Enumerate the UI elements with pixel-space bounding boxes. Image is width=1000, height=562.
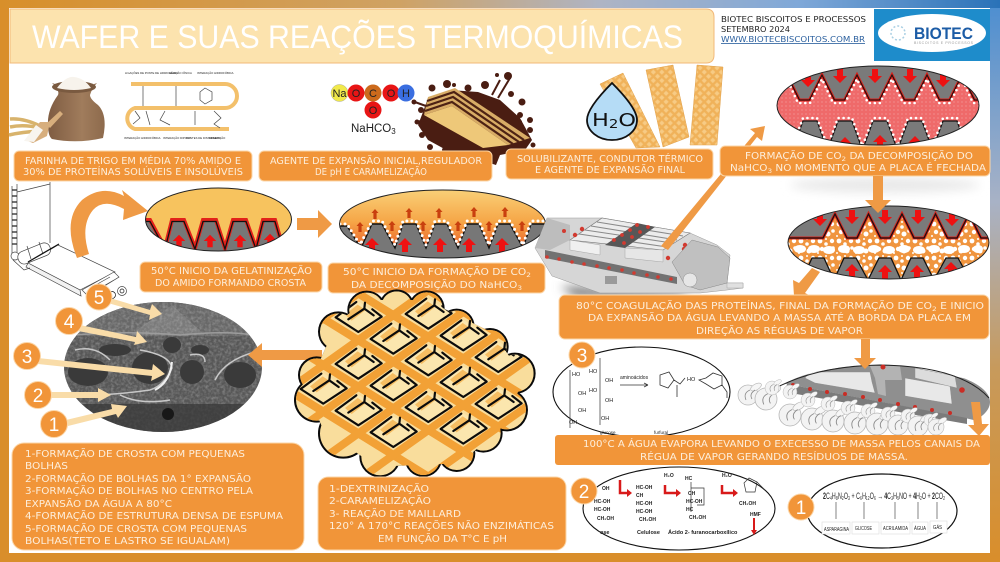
arrow: closed plate to coagulation xyxy=(865,176,891,213)
text box: estrutura legend: 1-FORMAÇÃO DE CROSTA COM PEQUENAS xyxy=(25,449,245,460)
icon: water drop: 2 xyxy=(609,117,618,131)
chemistry: Maillard sugar degradation: HO xyxy=(589,388,598,394)
text box: coagulação: E INICIO xyxy=(937,301,984,312)
text box: solubilizante: E AGENTE DE EXPANSÃO FINAL xyxy=(535,165,686,176)
pointer 2: 2 xyxy=(33,386,43,407)
text box: coagulação: DA EXPANSÃO DA ÁGUA LEVANDO A MASSA ATÉ A BORDA DA PLACA EM xyxy=(588,312,971,324)
icon: water drop xyxy=(587,83,637,140)
chemistry: caramelization chain: CH₂OH xyxy=(597,516,614,522)
text box: evaporação xyxy=(555,435,990,465)
text box: coagulação xyxy=(559,295,989,339)
BIOTEC logo: BIOTEC xyxy=(914,24,973,43)
text box: formação de CO2: 3 xyxy=(767,167,772,175)
company credits: BIOTEC BISCOITOS E PROCESSOS xyxy=(721,14,866,24)
arrow: coagulation to caption xyxy=(793,268,820,296)
company credits xyxy=(721,14,866,44)
chemistry: caramelization chain: HMF xyxy=(750,512,761,518)
chart: protein bond diagram: LIGAÇÕES DE PONTE DE HIDROGÊNIO xyxy=(125,70,179,75)
text box: reações xyxy=(318,477,566,550)
marker: number 1 chemistry: 1 xyxy=(796,498,806,519)
pointer 4 xyxy=(56,308,147,345)
text box: início CO2: 50°C INICIO DA FORMAÇÃO DE CO xyxy=(343,267,505,278)
text box: solubilizante xyxy=(506,149,713,179)
chart: protein bond diagram: INTERAÇÃO HIDROFÓBICA xyxy=(197,70,234,75)
pointer 4: 4 xyxy=(64,312,75,333)
chemistry: caramelization chain: Ácido 2- furanocarboxílico xyxy=(668,529,738,536)
text box: formação de CO2: DA DECOMPOSIÇÃO DO xyxy=(846,151,973,162)
text box: início CO2: 2 xyxy=(526,271,531,279)
chart: protein bond diagram: INTERAÇÃO HIDROFÓBICA xyxy=(124,135,161,140)
text box: solubilizante: SOLUBILIZANTE, CONDUTOR TÉRMICO xyxy=(517,153,703,165)
pointer 3: 3 xyxy=(22,347,32,368)
icon: flour sack xyxy=(9,77,105,143)
icon: NaHCO3 molecule: Na xyxy=(332,88,347,100)
ellipse: plate closed, CO2 formation xyxy=(776,66,980,146)
pointer 2 xyxy=(24,382,111,408)
chemistry: caramelization chain: CH₂OH xyxy=(639,517,656,523)
pointer 3 xyxy=(14,342,165,381)
text box: agente de expansão: DE pH E CARAMELIZAÇÃO xyxy=(315,167,427,178)
text box: coagulação: 80°C COAGULAÇÃO DAS PROTEÍNAS, FINAL DA FORMAÇÃO DE CO xyxy=(576,301,886,312)
text box: formação de CO2: 2 xyxy=(842,155,846,163)
text box: agente de expansão xyxy=(259,151,492,181)
ellipse: CO2 formation start xyxy=(339,190,546,258)
company credits: WWW.BIOTECBISCOITOS.COM.BR xyxy=(721,34,865,44)
text box: início CO2 xyxy=(328,263,545,293)
icon: NaHCO3 molecule: O xyxy=(387,88,396,100)
ellipse: coagulation and bubbles xyxy=(788,206,990,280)
pointer 1: 1 xyxy=(49,415,59,436)
chemistry: Maillard sugar degradation: OH xyxy=(601,416,609,422)
text box: reações: EM FUNÇÃO DA T°C E pH xyxy=(378,534,507,545)
chemistry: Maillard sugar degradation xyxy=(553,347,730,437)
text box: coagulação: DIREÇÃO AS RÉGUAS DE VAPOR xyxy=(696,325,864,337)
text box: início CO2: 3 xyxy=(517,284,522,292)
arrow: steam rail to residue caption xyxy=(968,402,989,436)
marker: number 2 chemistry: 2 xyxy=(579,482,589,503)
chart: protein bond diagram: INTERAÇÃO xyxy=(209,135,226,140)
marker: number 3 chemistry xyxy=(569,342,595,368)
pointer 5: 5 xyxy=(94,288,104,309)
title banner: WAFER E SUAS REAÇÕES TERMOQUÍMICAS xyxy=(32,18,683,55)
chemistry: caramelization chain: HC-OH xyxy=(636,485,653,491)
text box: formação de CO2: NO MOMENTO QUE A PLACA É FECHADA xyxy=(772,162,987,174)
pointer 5 xyxy=(86,284,162,320)
icon: chocolate wafer xyxy=(412,72,536,165)
soft shadow below caption xyxy=(790,177,980,193)
chemistry: Maillard sugar degradation: aminoácidos xyxy=(620,375,649,381)
arrow: waffle to micrograph xyxy=(248,343,322,367)
chemistry: caramelization chain: HC xyxy=(686,507,694,513)
icon: NaHCO3 molecule: C xyxy=(369,88,377,100)
chemistry: caramelization chain: Celulose xyxy=(637,530,660,536)
arrow: crust to CO2 ellipse xyxy=(297,210,332,238)
chemistry: Maillard sugar degradation: HO xyxy=(687,377,696,383)
chemistry: caramelization chain: HC xyxy=(685,476,693,482)
chemistry: caramelization chain: HC-OH xyxy=(686,499,703,505)
ellipse: steam rail with dough blobs xyxy=(738,360,995,436)
chemistry: caramelization chain: HC-OH xyxy=(636,509,653,515)
icon: water drop: H xyxy=(592,110,606,131)
chemistry: Maillard sugar degradation: furfural xyxy=(654,430,668,435)
chemistry: caramelization chain: HC-OH xyxy=(594,499,611,505)
text box: gelatinização: 50°C INICIO DA GELATINIZAÇÃO xyxy=(151,266,312,277)
ellipse: gelatinization crust xyxy=(145,188,292,252)
chemistry: caramelization chain: CH₂OH xyxy=(739,501,756,507)
text box: estrutura legend: BOLHAS(TETO E LASTRO SE IGUALAM) xyxy=(25,536,230,547)
text box: formação de CO2: NaHCO xyxy=(730,163,764,174)
text box: evaporação: RÉGUA DE VAPOR GERANDO RESÍDUOS DE MASSA. xyxy=(640,451,908,463)
text box: estrutura legend: 3-FORMAÇÃO DE BOLHAS NO CENTRO PELA xyxy=(25,486,254,497)
icon: wafer sheets xyxy=(600,65,723,148)
icon: NaHCO3 molecule: NaHCO xyxy=(351,123,391,135)
icon: NaHCO3 molecule: H xyxy=(402,88,410,100)
text box: farinha de trigo: 30% DE PROTEÍNAS SOLÚVEIS E INSOLÚVEIS xyxy=(23,166,243,178)
chemistry: caramelization chain: OH xyxy=(602,486,610,492)
chemistry: Maillard sugar degradation: OH xyxy=(605,398,613,404)
chemistry: Maillard sugar degradation: OH xyxy=(605,378,613,384)
photo: wafer cross-section micrograph xyxy=(60,300,266,435)
chemistry: acrylamide reaction: ACRILAMIDA xyxy=(883,526,909,532)
icon: NaHCO3 molecule: 3 xyxy=(391,127,396,136)
chemistry: caramelization chain: HC-OH xyxy=(636,501,653,507)
illustration: wafer press machine xyxy=(535,218,743,297)
frame: bottom bar xyxy=(9,553,990,562)
frame: left bar xyxy=(0,8,9,562)
BIOTEC logo: BISCOITOS E PROCESSOS xyxy=(914,41,974,45)
pointer 1 xyxy=(40,404,127,438)
frame: right bar xyxy=(990,8,1000,562)
text box: estrutura legend: 2-FORMAÇÃO DE BOLHAS DA 1° EXPANSÃO xyxy=(25,474,251,485)
chart: protein bond diagram: LIGAÇÃO IÔNICA xyxy=(169,70,192,75)
chemistry: caramelization chain: H₂O xyxy=(664,473,674,479)
text box: reações: 1-DEXTRINIZAÇÃO xyxy=(329,484,429,495)
chemistry: caramelization chain: CH xyxy=(688,491,696,497)
BIOTEC logo xyxy=(874,9,990,61)
text box: farinha de trigo xyxy=(14,151,252,181)
text box: evaporação: 100°C A ÁGUA EVAPORA LEVANDO O EXECESSO DE MASSA PELOS CANAIS DA xyxy=(583,438,981,450)
text box: estrutura legend xyxy=(12,443,304,550)
text box: coagulação: 2 xyxy=(932,305,937,313)
chemistry: Maillard sugar degradation: HO xyxy=(572,372,581,378)
icon: water drop: O xyxy=(618,110,636,131)
arrow: curved from conveyor to crust ellipse xyxy=(71,190,148,258)
company credits: SETEMBRO 2024 xyxy=(721,24,790,34)
chemistry: acrylamide reaction: ÁGUA xyxy=(914,525,927,532)
icon: NaHCO3 molecule xyxy=(331,84,414,136)
text box: início CO2: DA DECOMPOSIÇÃO DO NaHCO xyxy=(351,280,499,291)
text box: estrutura legend: 5-FORMAÇÃO DE CROSTA COM PEQUENAS xyxy=(25,524,247,535)
chemistry: acrylamide reaction: 2C₄H₈N₂O₃ + C₆H₁₂O₆ → 4C₃H₅NO + 4H₂O + 2CO₂ xyxy=(823,491,945,501)
chemistry: Maillard sugar degradation: OH xyxy=(578,391,586,397)
icon: conveyor machine xyxy=(11,182,126,298)
chemistry: acrylamide reaction: GÁS xyxy=(933,524,943,531)
chemistry: acrylamide reaction: GLICOSE xyxy=(855,526,873,532)
text box: gelatinização xyxy=(140,262,322,292)
text box: reações: 3- REAÇÃO DE MAILLARD xyxy=(329,509,461,520)
chemistry: caramelization chain: CH₂OH xyxy=(689,515,706,521)
chart: protein bond diagram: PONTES DE DISSULFETO xyxy=(186,136,221,140)
chemistry: Maillard sugar degradation: OH xyxy=(578,408,586,414)
text box: estrutura legend: BOLHAS xyxy=(25,461,68,472)
callouts: numbered pointers on micrograph xyxy=(14,284,165,438)
chart: protein bond diagram: INTERAÇÃO DIPOLO xyxy=(163,135,191,140)
chemistry: caramelization chain: CH xyxy=(636,493,644,499)
chemistry: acrylamide reaction: ASPARAGINA xyxy=(824,527,850,533)
marker: number 3 chemistry: 3 xyxy=(577,346,587,367)
chemistry: caramelization chain: H₂O xyxy=(722,473,732,479)
chemistry: Maillard sugar degradation: glucose xyxy=(600,430,616,435)
chemistry: Maillard sugar degradation: OH xyxy=(569,420,577,426)
chemistry: caramelization chain: ose xyxy=(600,530,609,536)
chemistry: acrylamide reaction xyxy=(807,474,957,548)
chart: protein bond diagram xyxy=(124,70,237,140)
chemistry: caramelization chain xyxy=(583,467,775,550)
arrow: press machine to closed-plate ellipse xyxy=(661,126,765,250)
frame: top bar xyxy=(0,0,1000,8)
chemistry: caramelization chain: HC-OH xyxy=(594,507,611,513)
text box: reações: 120° A 170°C REAÇÕES NÃO ENZIMÁTICAS xyxy=(329,520,554,532)
marker: number 2 chemistry xyxy=(571,478,597,504)
title banner xyxy=(10,9,714,63)
text box: agente de expansão: AGENTE DE EXPANSÃO INICIAL,REGULADOR xyxy=(270,156,482,167)
text box: formação de CO2: FORMAÇÃO DE CO xyxy=(745,151,832,162)
text box: gelatinização: DO AMIDO FORMANDO CROSTA xyxy=(155,278,307,289)
marker: number 1 chemistry xyxy=(788,494,814,520)
chemistry: Maillard sugar degradation: HO xyxy=(589,369,598,375)
text box: farinha de trigo: FARINHA DE TRIGO EM MÉDIA 70% AMIDO E xyxy=(25,155,241,167)
text box: estrutura legend: 4-FORMAÇÃO DE ESTRUTURA DENSA DE ESPUMA xyxy=(25,511,284,522)
text box: formação de CO2 xyxy=(720,146,990,176)
text box: reações: 2-CARAMELIZAÇÃO xyxy=(329,496,431,507)
icon: NaHCO3 molecule: O xyxy=(369,105,378,117)
icon: NaHCO3 molecule: O xyxy=(352,88,361,100)
text box: estrutura legend: EXPANSÃO DA ÁGUA A 80°C xyxy=(25,498,172,510)
illustration: waffle xyxy=(294,289,536,476)
arrow: coagulation caption to steam rail xyxy=(854,339,876,369)
